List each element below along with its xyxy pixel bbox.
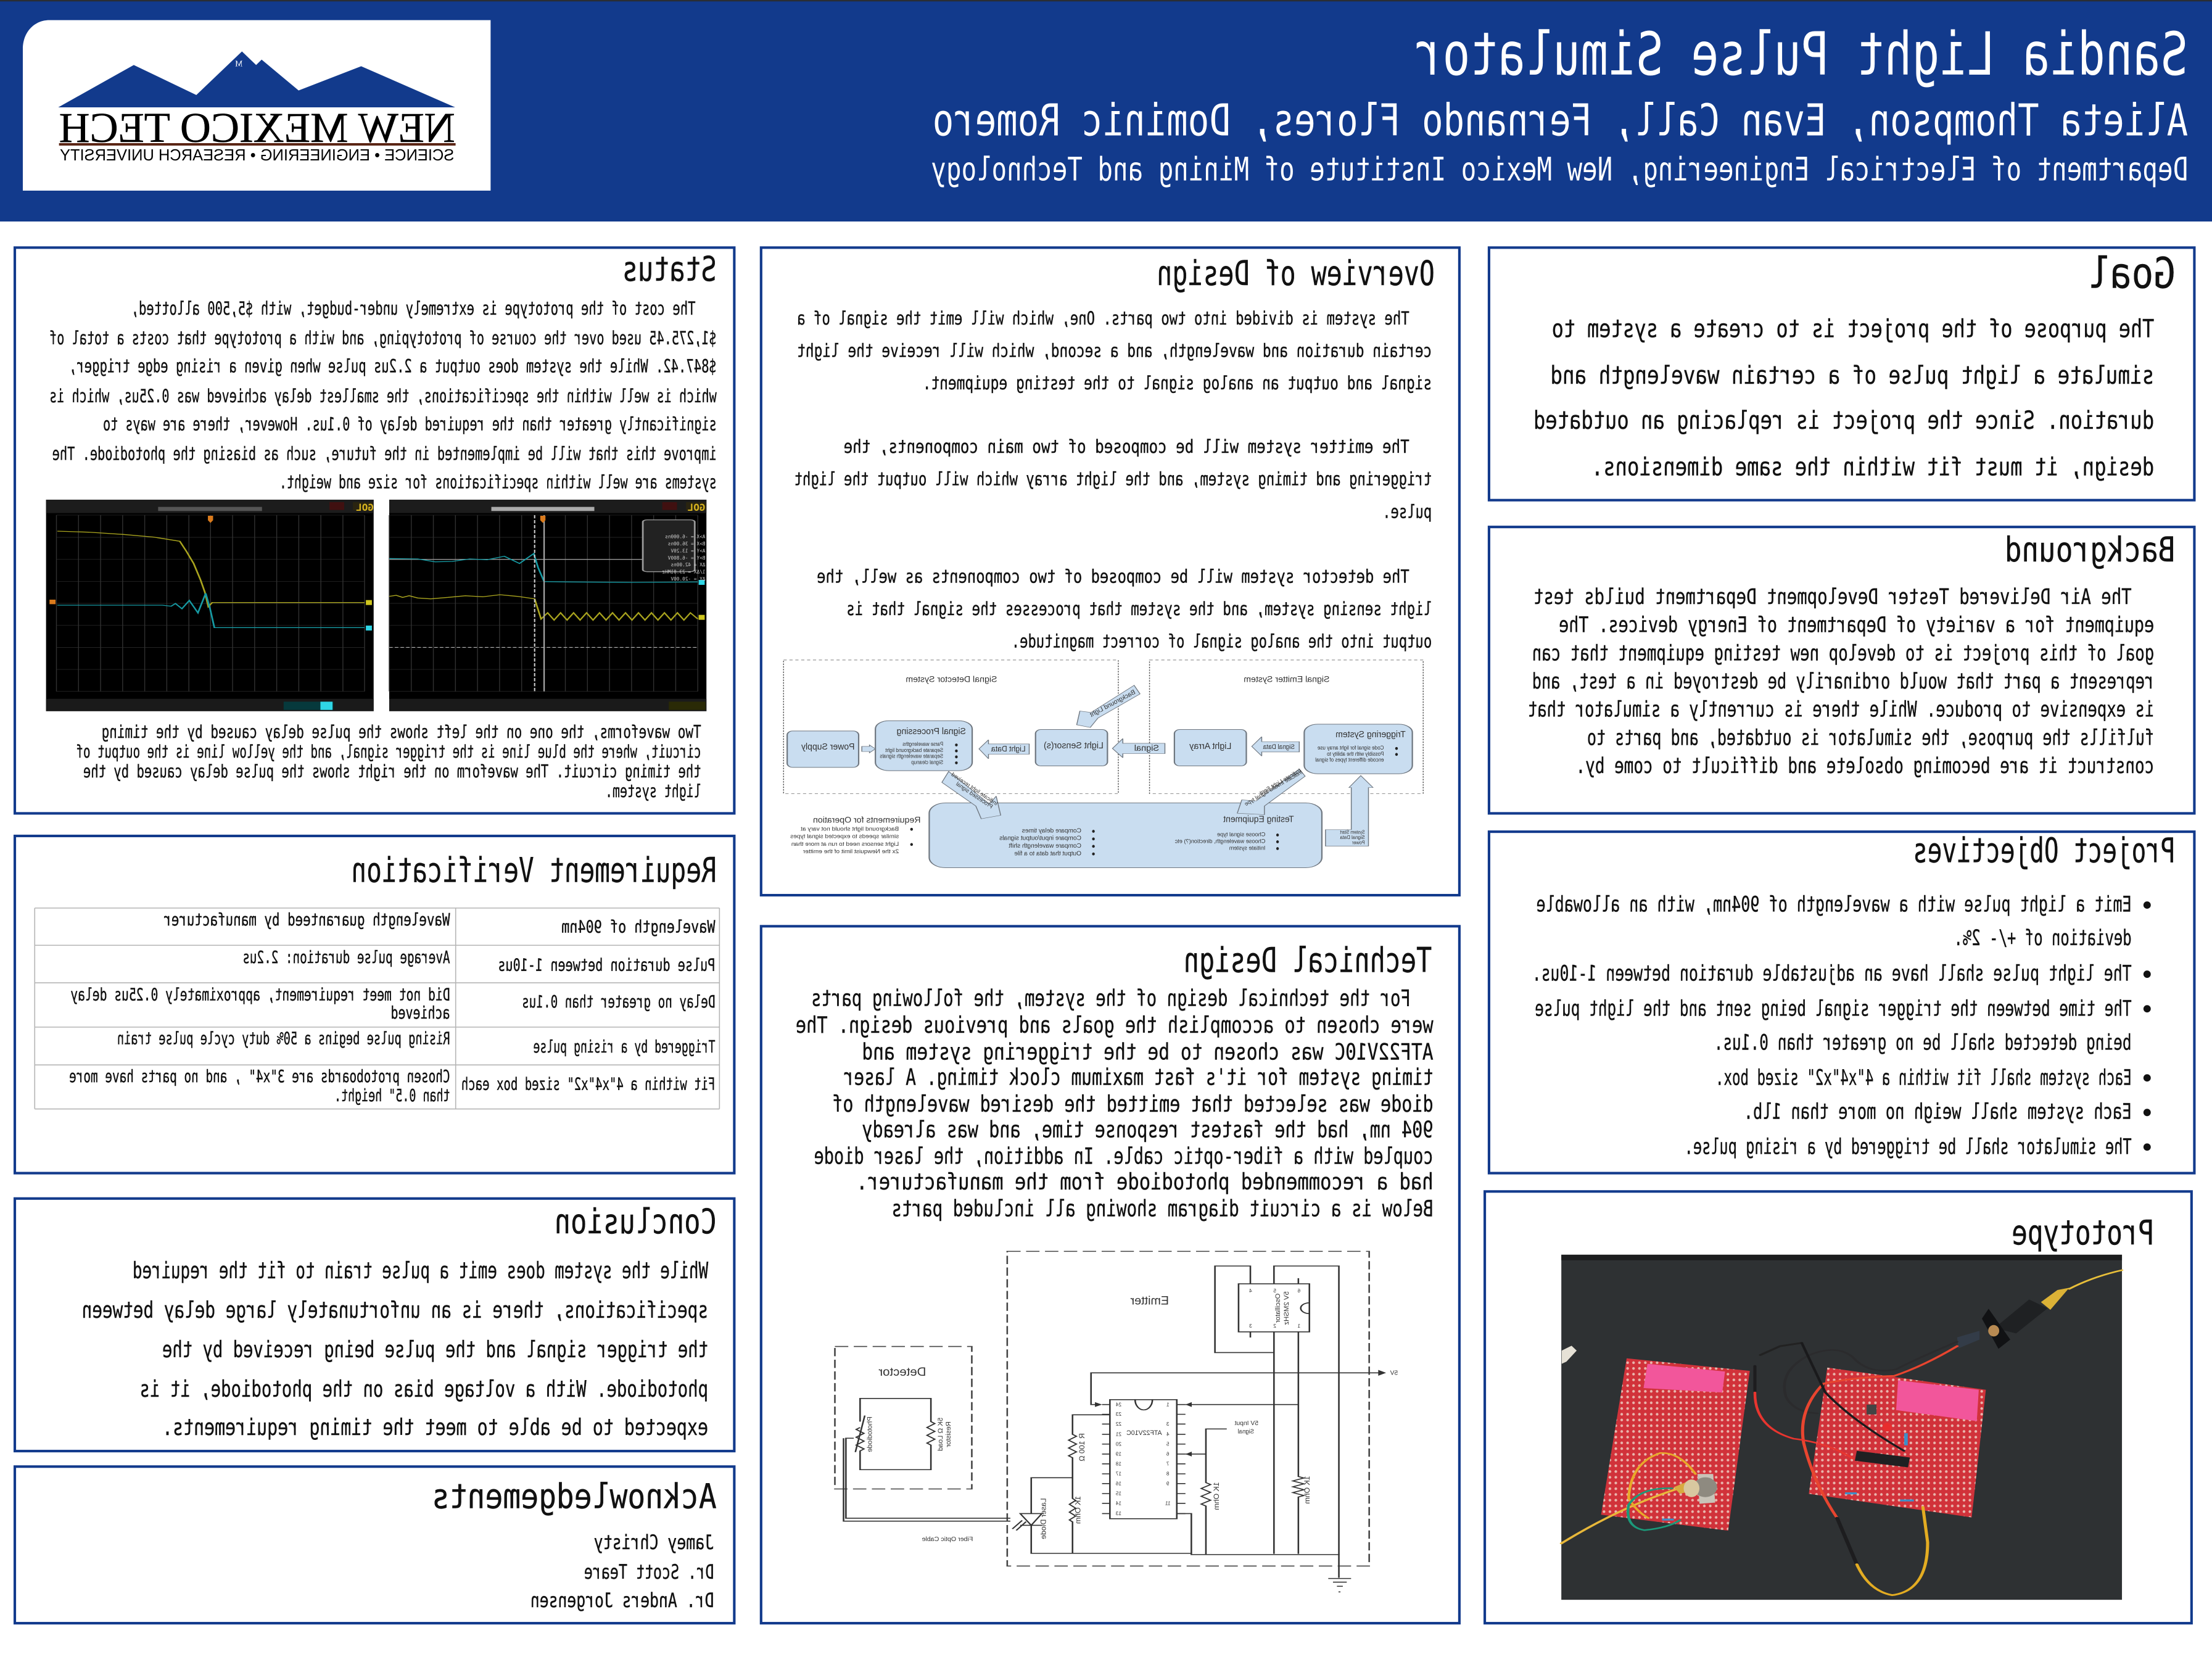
circuit diagram: 1K Ohm	[1303, 1476, 1311, 1504]
objectives list: Each system shall weigh no more than 1lb.	[1744, 1100, 2132, 1125]
table: requirements: Average pulse duration: 2.2us	[242, 948, 450, 967]
overview text: output into the analog signal of correct magnitude.	[1012, 631, 1432, 653]
circuit diagram: 2	[1273, 1323, 1276, 1329]
goal text: The purpose of the project is to create a system to	[1552, 315, 2154, 344]
block diagram: system overview: Signal Data	[1340, 835, 1365, 840]
goal text: simulate a light pulse of a certain wavelength and	[1550, 362, 2154, 390]
block diagram: system overview: Background Light	[1089, 688, 1137, 719]
conclusion text	[82, 1257, 708, 1441]
circuit diagram: Oscillator	[1274, 1294, 1282, 1323]
heading: technical design: Technical Design	[1184, 941, 1432, 980]
chart: oscilloscope waveforms: GOL	[688, 502, 705, 513]
table: requirements: than 0.5" height.	[334, 1086, 450, 1106]
circuit diagram: 23	[1115, 1412, 1121, 1417]
block diagram: system overview: Light Data	[991, 745, 1026, 753]
block diagram: system overview: System Start	[1340, 830, 1365, 835]
overview text: signal and output an analog signal to the testing equipment.	[923, 373, 1432, 394]
block diagram: system overview: Compare input/output signals	[999, 835, 1081, 842]
heading: overview of design: Overview of Design	[1157, 254, 1435, 293]
circuit diagram: 5V	[1390, 1370, 1398, 1377]
logo: New Mexico Tech	[23, 20, 490, 191]
overview text: certain duration and wavelength, and a second, which will receive the light	[797, 341, 1432, 362]
table: requirements: Wavelength guaranteed by manufacturer	[163, 911, 450, 930]
circuit diagram: 1K Ohm	[1074, 1496, 1083, 1524]
chart: oscilloscope waveforms: A>Y = 13.20V	[671, 548, 705, 553]
block diagram: system overview: Signal Emitter System	[1244, 675, 1329, 684]
block diagram: system overview: Signal Processing	[897, 727, 966, 737]
circuit diagram: 4	[1166, 1432, 1169, 1437]
table: requirements: Triggered by a rising pulse	[533, 1038, 716, 1057]
objectives list: deviation of +/- 2%.	[1954, 926, 2132, 951]
background text: fulfills the purpose, the simulator is outdated, and parts to	[1587, 726, 2154, 750]
photo: prototype boards	[1559, 1255, 2123, 1600]
panel: goal	[1489, 247, 2194, 500]
block diagram: system overview: Code signal for light array use	[1318, 745, 1384, 751]
circuit diagram: 11	[1165, 1500, 1170, 1506]
circuit diagram: Photodiode	[866, 1416, 873, 1452]
block diagram: system overview: Possibly with the ability to	[1327, 751, 1384, 757]
background text: The Air Delivered Tester Development Department builds test	[1533, 585, 2132, 610]
block diagram: system overview: Power	[1352, 840, 1365, 846]
circuit diagram: 1K Ohm	[1212, 1482, 1221, 1510]
objectives list: The light pulse shall have an adjustable duration between 1-10us.	[1532, 961, 2132, 986]
logo: New Mexico Tech: M	[235, 59, 242, 68]
block diagram: system overview: Triggering System	[1335, 730, 1406, 740]
heading: status: Status	[622, 249, 717, 289]
heading: acknowledgements: Acknowledgements	[432, 1477, 717, 1516]
background text: represent a part that would ordinarily be destroyed in a test, and	[1532, 669, 2154, 694]
table: requirements: Wavelength of 904nm	[561, 918, 716, 937]
technical design text	[796, 985, 1434, 1222]
heading: goal: Goal	[2088, 249, 2176, 299]
block diagram: system overview: Indicate light received	[951, 771, 999, 807]
technical design text: For the technical design of the system, the following parts	[811, 985, 1411, 1012]
block diagram: system overview: Choose signal type	[1217, 832, 1265, 838]
circuit diagram: 1	[1297, 1323, 1300, 1329]
acknowledged names: Dr. Scott Teare	[584, 1560, 714, 1584]
table: requirements	[35, 908, 719, 1109]
block diagram: system overview: Signal Data	[1263, 743, 1295, 751]
table: requirements: Fit within a 4"x4"x2" sized box each	[461, 1075, 716, 1094]
circuit diagram: 21	[1115, 1432, 1121, 1437]
table: requirements: achieved	[390, 1004, 450, 1023]
circuit diagram	[835, 1251, 1398, 1592]
title and authors: Sandia Light Pulse Simulator	[1415, 20, 2188, 89]
heading: conclusion: Conclusion	[555, 1202, 717, 1241]
heading: project objectives: Project Objectives	[1913, 830, 2176, 870]
panel: overview of design	[761, 247, 1459, 895]
panel: conclusion	[15, 1199, 734, 1451]
circuit diagram: ATF22V10C	[1126, 1429, 1162, 1437]
overview text: The emitter system will be composed of two main components, the	[844, 436, 1409, 458]
conclusion text: expected to be able to meet the timing requirements.	[162, 1414, 708, 1441]
technical design text: coupled with a fiber-optic cable. In addition, the laser diode	[814, 1143, 1434, 1170]
table: requirements: Delay no greater than 0.1us	[522, 993, 716, 1012]
chart: oscilloscope waveforms: 1/ΔX = 23.81MHz	[662, 569, 705, 575]
block diagram: system overview: Choose wavelength, direction(?) etc	[1174, 838, 1265, 845]
circuit diagram: 17	[1115, 1471, 1121, 1477]
overview text: The detector system will be composed of two components as well, the	[817, 566, 1409, 588]
block diagram: system overview: Indicate Invalid signal type	[1244, 769, 1303, 807]
acknowledged names: Jamey Christy	[594, 1531, 714, 1554]
circuit diagram: Resistor	[945, 1421, 952, 1447]
circuit diagram: 3	[1249, 1323, 1252, 1329]
circuit diagram: 14	[1115, 1500, 1121, 1506]
panel: project objectives	[1489, 830, 2194, 1173]
background text: equipment for a variety of Department of Energy devices. The	[1559, 613, 2154, 638]
chart: oscilloscope waveforms: ΔX = 42.00ns	[671, 562, 705, 568]
circuit diagram: 4	[1249, 1288, 1252, 1294]
heading: prototype: Prototype	[2012, 1213, 2154, 1252]
objectives list: Each system shall fit within a 4"x4"x2" sized box.	[1715, 1066, 2132, 1091]
overview text: triggering and timing system, and the light array which will output the light	[794, 469, 1432, 490]
title and authors	[931, 20, 2188, 189]
heading: background: Background	[2005, 530, 2176, 569]
objectives list	[1532, 892, 2151, 1160]
circuit diagram: 18	[1115, 1461, 1121, 1466]
panel: prototype	[1485, 1191, 2192, 1623]
block diagram: system overview: Indicate Light Sent	[1258, 767, 1302, 796]
circuit diagram: 5	[1273, 1288, 1276, 1294]
block diagram: system overview: Compare delay times	[1022, 827, 1081, 835]
block diagram: system overview: Light Sensor(s)	[1044, 741, 1104, 751]
circuit diagram: Signal	[1238, 1429, 1254, 1436]
block diagram: system overview: Signal cleanup	[911, 759, 943, 765]
panel: requirement verification	[15, 836, 734, 1173]
logo: New Mexico Tech: NEW MEXICO TECH	[59, 104, 455, 151]
circuit diagram: Emitter	[1130, 1294, 1169, 1307]
chart: oscilloscope waveforms	[46, 500, 706, 711]
circuit diagram: 9	[1166, 1481, 1169, 1487]
acknowledged names	[530, 1531, 714, 1612]
block diagram: system overview: Parse wavelengths	[902, 741, 943, 747]
overview text: pulse.	[1382, 501, 1432, 523]
block diagram: system overview: Light sensors need to run at more than	[791, 841, 899, 848]
circuit diagram: 5V Input	[1234, 1420, 1258, 1427]
background text: construct it are becoming obsolete and difficult to come by.	[1576, 754, 2154, 779]
heading: requirement verification: Requirement Verification	[351, 850, 717, 890]
background text	[1528, 585, 2154, 779]
block diagram: system overview: Requirements for Operation	[813, 816, 920, 825]
goal text	[1533, 315, 2154, 482]
circuit diagram: 3	[1166, 1421, 1169, 1427]
technical design text: 904 nm, had the fastest response time, and was already	[862, 1116, 1434, 1143]
header banner	[0, 0, 2212, 221]
panel: technical design	[761, 926, 1459, 1623]
circuit diagram: 20	[1115, 1441, 1121, 1447]
panel: acknowledgements	[15, 1466, 734, 1623]
block diagram: system overview: Power Supply	[801, 742, 854, 752]
title and authors: Alieta Thompson, Evan Call, Fernando Flores, Dominic Romero	[933, 95, 2188, 146]
block diagram: system overview: Signal Detector System	[906, 675, 997, 684]
circuit diagram: 5V 2MSHz	[1283, 1291, 1290, 1325]
technical design text: diode was selected that emitted the desired wavelength of	[832, 1091, 1434, 1117]
overview text: light sensing system, and the system that processes the signal that is	[846, 598, 1432, 620]
status text	[49, 298, 717, 493]
circuit diagram: 1	[1166, 1402, 1169, 1407]
block diagram: system overview: Compare wavelength shift	[1009, 842, 1081, 850]
circuit diagram: 19	[1115, 1452, 1121, 1457]
status caption: light system.	[605, 780, 701, 801]
circuit diagram: 16	[1115, 1481, 1121, 1487]
overview text: The system is divided into two parts. One, which will emit the signal of a	[797, 308, 1409, 329]
circuit diagram: Laser Diode	[1039, 1498, 1047, 1539]
goal text: design, it must fit within the same dimensions.	[1591, 453, 2154, 482]
block diagram: system overview: Processed signal	[955, 780, 994, 810]
block diagram: system overview: Signal	[1134, 743, 1159, 753]
circuit diagram: 7	[1166, 1461, 1169, 1466]
technical design text: timing system for it's fast maximum clock timing. A laser	[844, 1064, 1434, 1091]
technical design text: ATF22V10C was chosen to be the triggering system and	[862, 1038, 1434, 1065]
circuit diagram: 24	[1115, 1402, 1121, 1407]
circuit diagram: 13	[1115, 1511, 1121, 1516]
block diagram: system overview: Separate background light	[885, 747, 943, 753]
status caption	[76, 721, 701, 801]
circuit diagram: 8	[1166, 1471, 1169, 1477]
objectives list: Emit a light pulse with a wavelength of 904nm, with an allowable	[1537, 892, 2132, 917]
block diagram: system overview	[783, 660, 1423, 868]
panel: background	[1489, 527, 2194, 813]
title and authors: Department of Electrical Engineering, New Mexico Institute of Mining and Technology	[931, 151, 2188, 189]
block diagram: system overview: Background light should not vary at	[801, 825, 899, 832]
chart: oscilloscope waveforms: B>X = 36.00ns	[668, 541, 705, 547]
overview text	[794, 308, 1432, 653]
chart: oscilloscope waveforms: A>X = -6.000ns	[665, 534, 705, 539]
circuit diagram: R 100 Ω	[1078, 1433, 1086, 1461]
block diagram: system overview: Initiate system	[1229, 845, 1265, 851]
goal text: duration. Since the project is replacing an outdated	[1533, 407, 2154, 435]
objectives list: The time between the trigger signal being sent and the light pulse	[1535, 997, 2132, 1022]
background text: goal of this project is to develop new testing equipment that can	[1532, 641, 2154, 666]
technical design text: were chosen to accomplish the goals and previous design. The	[796, 1012, 1434, 1038]
block diagram: system overview: similar speeds to expected signal types	[790, 833, 899, 840]
technical design text: had a recommended photodiode from the manufacturer.	[856, 1168, 1434, 1195]
chart: oscilloscope waveforms: GOL	[356, 502, 374, 513]
chart: oscilloscope waveforms: B>Y = -6.800V	[667, 555, 705, 561]
background text: is expensive to produce. While there is currently a simulator that	[1528, 698, 2154, 722]
status text: systems are well within specifications for size and weight.	[279, 471, 717, 493]
block diagram: system overview: Output that data to a file	[1014, 850, 1081, 857]
block diagram: system overview: encode different types of signal	[1315, 756, 1384, 763]
block diagram: system overview: Separate wavelength signals	[880, 753, 943, 759]
circuit diagram: 6	[1297, 1288, 1300, 1294]
block diagram: system overview: 2x the Newquist limit of the emitter	[803, 848, 899, 855]
circuit diagram: 22	[1115, 1421, 1121, 1427]
table: requirements: Pulse duration between 1-10us	[498, 956, 716, 975]
objectives list: being detected shall be no greater than 0.1us.	[1714, 1030, 2132, 1055]
objectives list: The simulator shall be triggered by a rising pulse.	[1685, 1135, 2132, 1160]
circuit diagram: 5K Ω Load	[937, 1418, 944, 1451]
technical design text: Below is a circuit diagram showing all included parts	[891, 1195, 1434, 1222]
logo: New Mexico Tech: SCIENCE • ENGINEERING • RESEARCH UNIVERSITY	[60, 146, 454, 164]
circuit diagram: Fiber Optic Cable	[922, 1536, 973, 1543]
panel: status	[15, 247, 734, 813]
block diagram: system overview: Light Array	[1189, 742, 1231, 751]
circuit diagram: 15	[1115, 1491, 1121, 1497]
circuit diagram: 6	[1166, 1452, 1169, 1457]
chart: oscilloscope waveforms: ΔY = -20.00V	[671, 576, 705, 582]
acknowledged names: Dr. Anders Jorgensen	[530, 1589, 714, 1612]
circuit diagram: Detector	[878, 1365, 926, 1379]
circuit diagram: 5	[1166, 1441, 1169, 1447]
block diagram: system overview: Testing Equipment	[1223, 814, 1294, 824]
